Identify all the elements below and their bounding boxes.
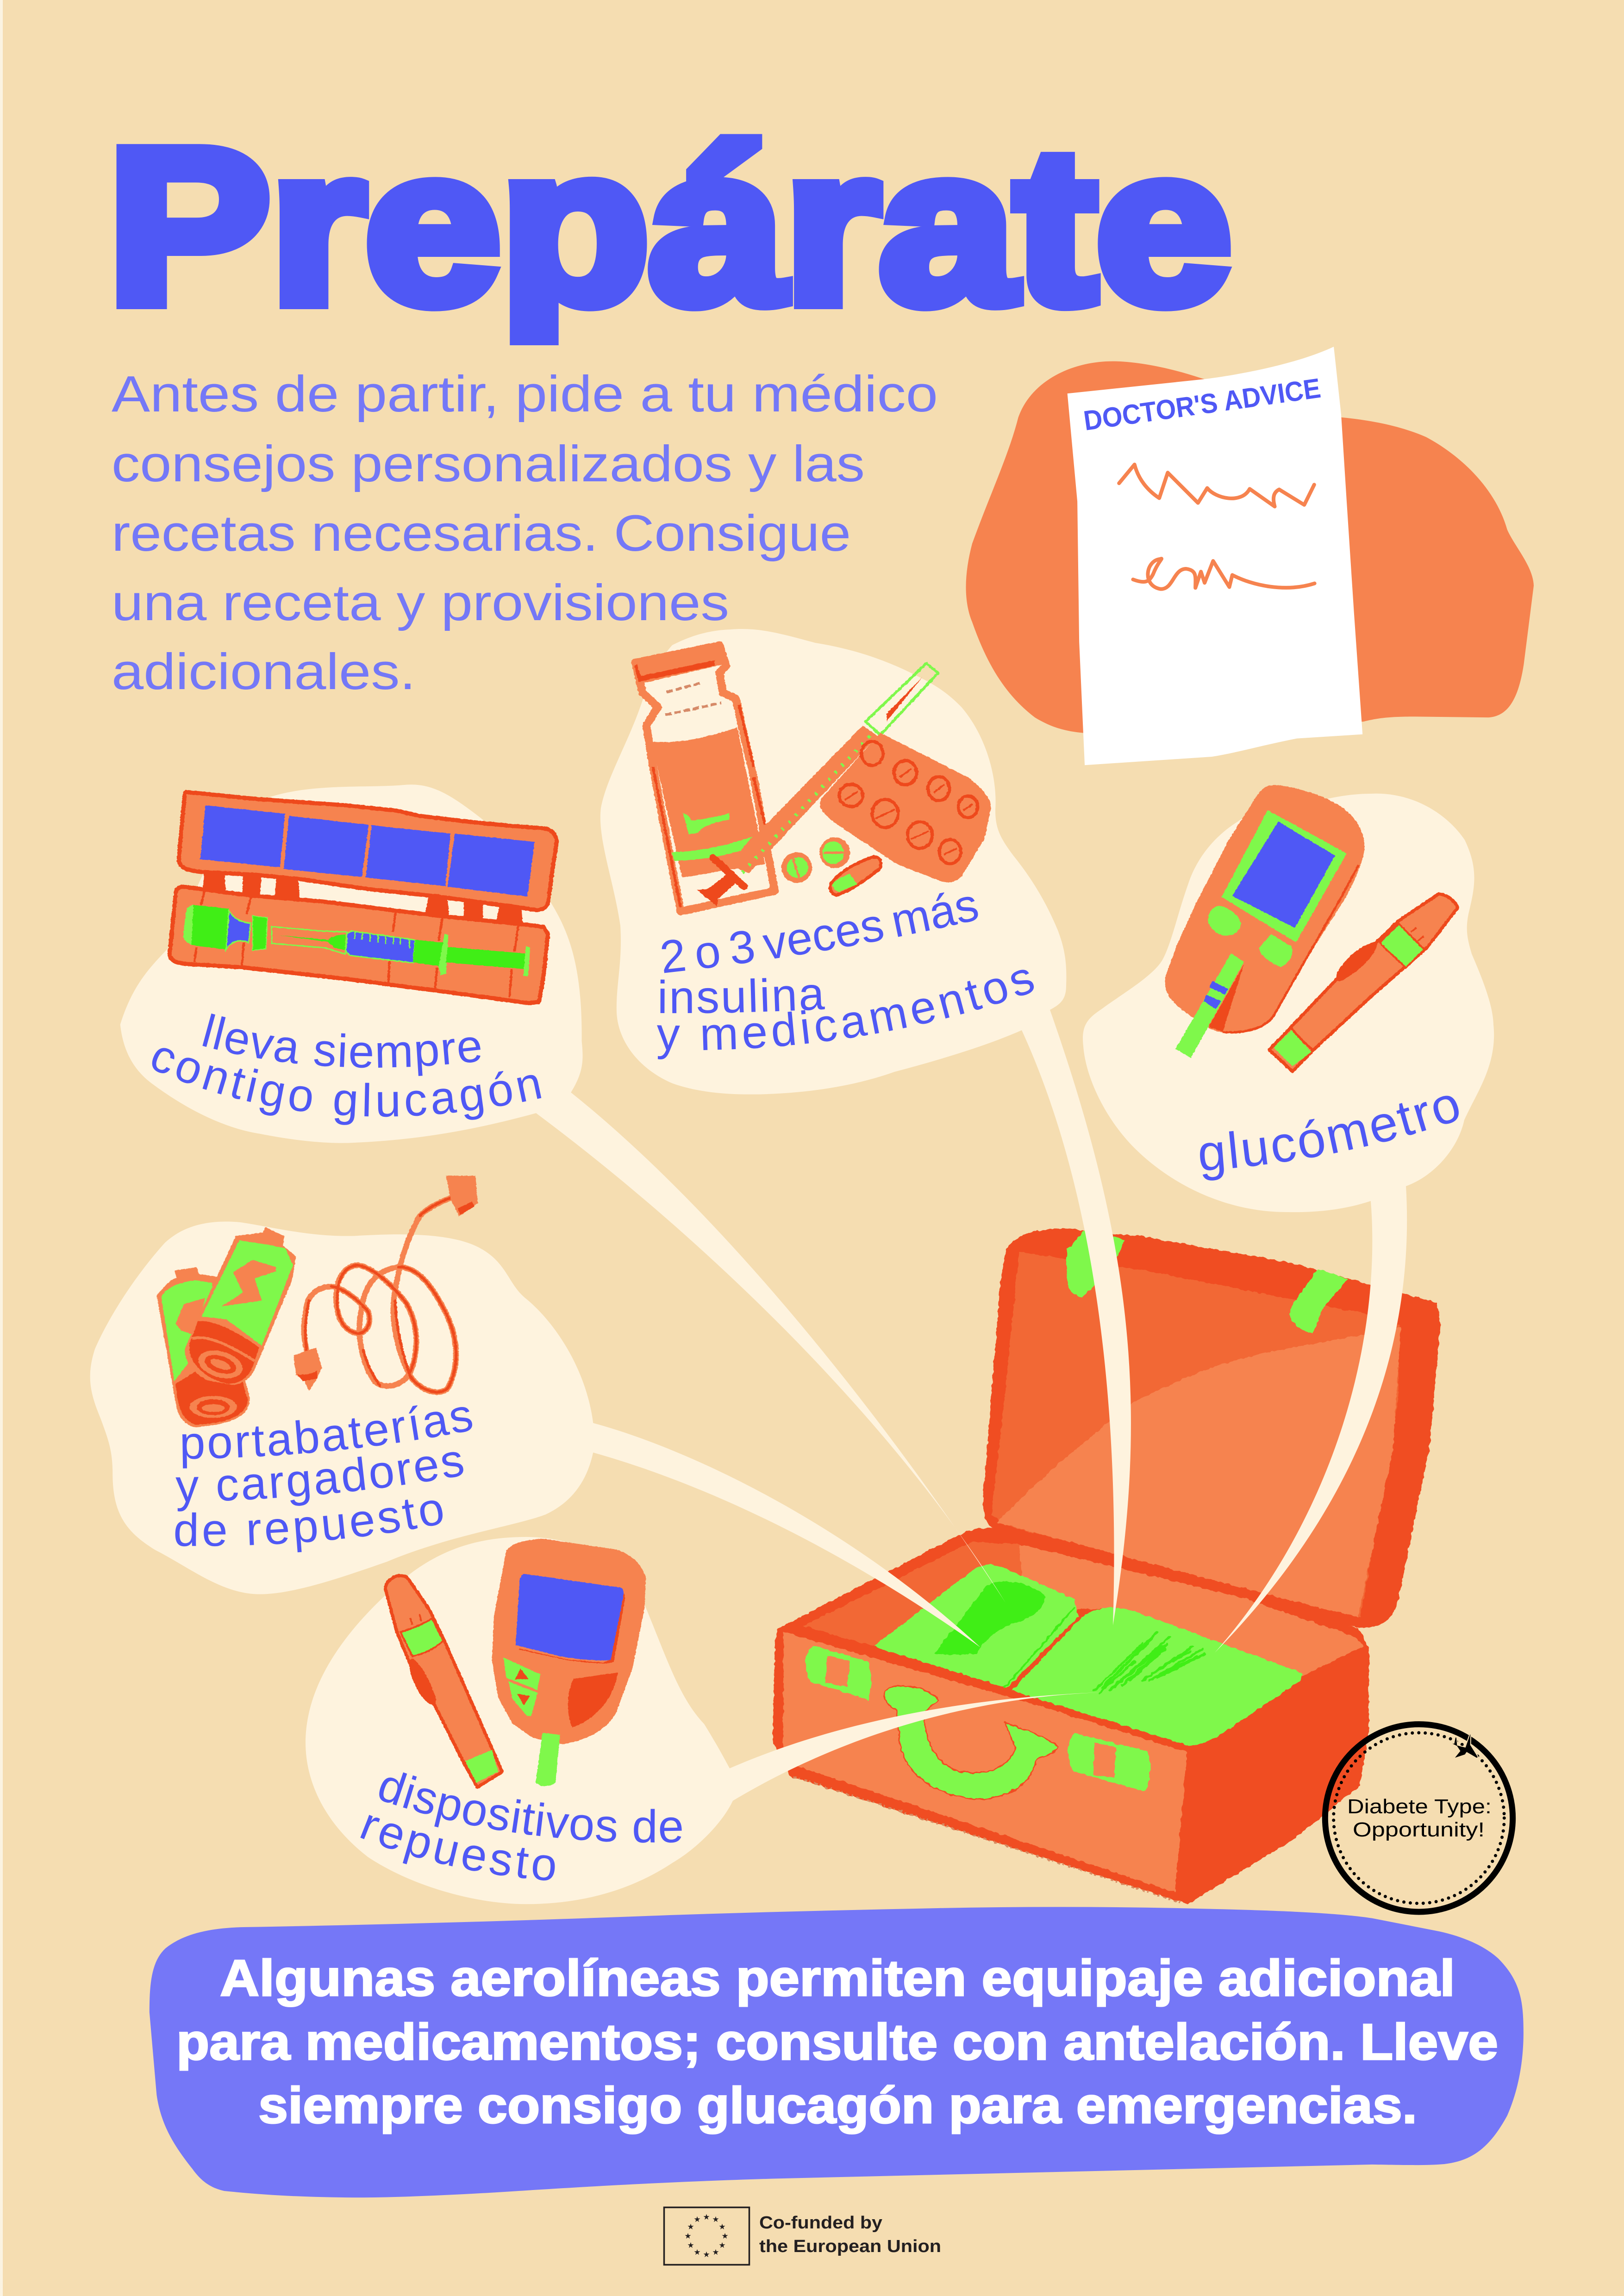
banner text: para medicamentos; consulte con antelación. Lleve bbox=[176, 2014, 1498, 2071]
icon: glucagon case bbox=[169, 792, 557, 1003]
intro text bbox=[112, 366, 938, 700]
icon: batteries and cable bbox=[156, 1176, 478, 1427]
funding text: the European Union bbox=[759, 2237, 941, 2256]
stamp text: Opportunity! bbox=[1353, 1818, 1485, 1841]
label: glucometer: glucómetro bbox=[1195, 1074, 1469, 1182]
test strip bbox=[1209, 964, 1244, 1032]
funding text bbox=[759, 2213, 941, 2256]
suitcase front panel bbox=[783, 1632, 1187, 1892]
EU flag outline: ★ bbox=[703, 2250, 710, 2259]
EU flag outline: ★ bbox=[687, 2222, 694, 2231]
EU flag outline: ★ bbox=[721, 2232, 729, 2240]
label: insulin and medication: y medicamentos bbox=[656, 950, 1044, 1060]
stamp text bbox=[1347, 1795, 1492, 1841]
banner text: siempre consigo glucagón para emergencias. bbox=[258, 2077, 1417, 2134]
intro text: recetas necesarias. Consigue bbox=[112, 505, 851, 562]
packed clothes right bbox=[1012, 1607, 1303, 1746]
case base bbox=[169, 887, 548, 1003]
intro text: una receta y provisiones bbox=[112, 574, 729, 631]
meter body bbox=[1165, 785, 1364, 1033]
scribble line two bbox=[1133, 559, 1315, 589]
suitcase lid bbox=[984, 1228, 1439, 1627]
front latch left bbox=[806, 1645, 871, 1700]
label: power banks and chargers: y cargadores bbox=[175, 1433, 470, 1512]
bubble with pointer to suitcase bbox=[90, 1222, 981, 1647]
banner text bbox=[176, 1950, 1498, 2134]
icon: airplane bbox=[1450, 1734, 1478, 1759]
EU co-funding logo bbox=[664, 2208, 941, 2265]
label: glucagon: lleva siempre bbox=[197, 1005, 486, 1078]
suitcase handle bbox=[884, 1686, 1058, 1799]
icon: spare lancet and meter bbox=[386, 1539, 646, 1787]
vial bbox=[183, 905, 268, 951]
panel: glucometer bbox=[1083, 785, 1494, 1653]
EU flag outline: ★ bbox=[718, 2241, 726, 2250]
bubble with pointer to suitcase bbox=[1083, 794, 1494, 1653]
EU flag outline: ★ bbox=[693, 2215, 701, 2224]
EU flag outline: ★ bbox=[712, 2248, 719, 2257]
syringe bbox=[272, 927, 530, 976]
label: insulin and medication bbox=[656, 878, 1044, 1060]
doctor's advice heading: DOCTOR'S ADVICE bbox=[1081, 373, 1323, 436]
paper sheet bbox=[1068, 347, 1362, 765]
stamp rings bbox=[1325, 1724, 1513, 1912]
intro text: adicionales. bbox=[112, 643, 416, 700]
label: spare devices: repuesto bbox=[354, 1798, 562, 1892]
buttons bbox=[1208, 906, 1241, 936]
EU flag outline: ★ bbox=[718, 2222, 726, 2231]
scribble line one bbox=[1119, 465, 1314, 507]
panel: glucagon bbox=[120, 784, 1006, 1603]
icon: insulin vial, syringe and pills bbox=[633, 646, 991, 912]
EU flag outline: ★ bbox=[693, 2248, 701, 2257]
title: Prepárate bbox=[108, 103, 1231, 350]
intro text: consejos personalizados y las bbox=[112, 436, 865, 492]
bubble with pointer to suitcase bbox=[120, 784, 1006, 1603]
label: spare devices bbox=[354, 1759, 685, 1892]
label: power banks and chargers: de repuesto bbox=[173, 1481, 451, 1556]
label: power banks and chargers bbox=[173, 1388, 479, 1556]
hinges bbox=[202, 870, 523, 925]
icon: open suitcase bbox=[773, 1228, 1439, 1903]
label: glucagon: contigo glucagón bbox=[143, 1029, 550, 1127]
packed clothes left bbox=[874, 1565, 1078, 1688]
front latch right bbox=[1068, 1733, 1150, 1792]
stamp text: Diabete Type: bbox=[1347, 1795, 1492, 1818]
suitcase base bbox=[773, 1529, 1368, 1903]
label: insulin and medication: 2 o 3 veces más bbox=[657, 878, 983, 983]
vial bbox=[633, 646, 775, 912]
panel: insulin and medication bbox=[600, 629, 1131, 1625]
orange blob bbox=[966, 361, 1534, 733]
panel: spare devices bbox=[306, 1537, 1105, 1904]
back battery bbox=[156, 1267, 250, 1427]
cable bbox=[294, 1176, 478, 1392]
bubble with pointer to suitcase bbox=[600, 629, 1131, 1625]
screen bbox=[1222, 810, 1347, 942]
label: spare devices: dispositivos de bbox=[372, 1759, 685, 1853]
lancet bbox=[386, 1576, 502, 1787]
bubble with pointer to suitcase bbox=[306, 1537, 1105, 1904]
blue panes bbox=[200, 805, 535, 896]
front battery bbox=[185, 1227, 296, 1385]
blister pack bbox=[819, 733, 991, 883]
banner shape bbox=[150, 1907, 1524, 2197]
intro text: Antes de partir, pide a tu médico bbox=[112, 366, 938, 423]
lancet bbox=[1269, 894, 1457, 1071]
EU flag outline: ★ bbox=[703, 2213, 710, 2221]
EU flag outline bbox=[664, 2208, 749, 2265]
panel: doctor's advice bbox=[966, 347, 1534, 765]
EU flag outline: ★ bbox=[687, 2241, 694, 2250]
EU flag outline: ★ bbox=[684, 2232, 692, 2240]
meter bbox=[492, 1539, 646, 1786]
strap lines bbox=[194, 891, 518, 997]
stamp: Diabete Type Opportunity bbox=[1325, 1724, 1513, 1912]
icon: glucometer and lancet bbox=[1165, 785, 1457, 1071]
funding text: Co-funded by bbox=[759, 2213, 882, 2233]
loose pills bbox=[781, 837, 881, 895]
banner text: Algunas aerolíneas permiten equipaje adicional bbox=[220, 1950, 1455, 2007]
syringe bbox=[697, 663, 938, 906]
label: insulin and medication: insulina bbox=[657, 967, 827, 1023]
front top edge bbox=[797, 1627, 1187, 1749]
label: power banks and chargers: portabaterías bbox=[179, 1388, 479, 1469]
EU flag outline: ★ bbox=[712, 2215, 719, 2224]
panel: power banks and chargers bbox=[90, 1176, 981, 1647]
callout banner bbox=[150, 1907, 1524, 2197]
case lid bbox=[179, 792, 557, 910]
